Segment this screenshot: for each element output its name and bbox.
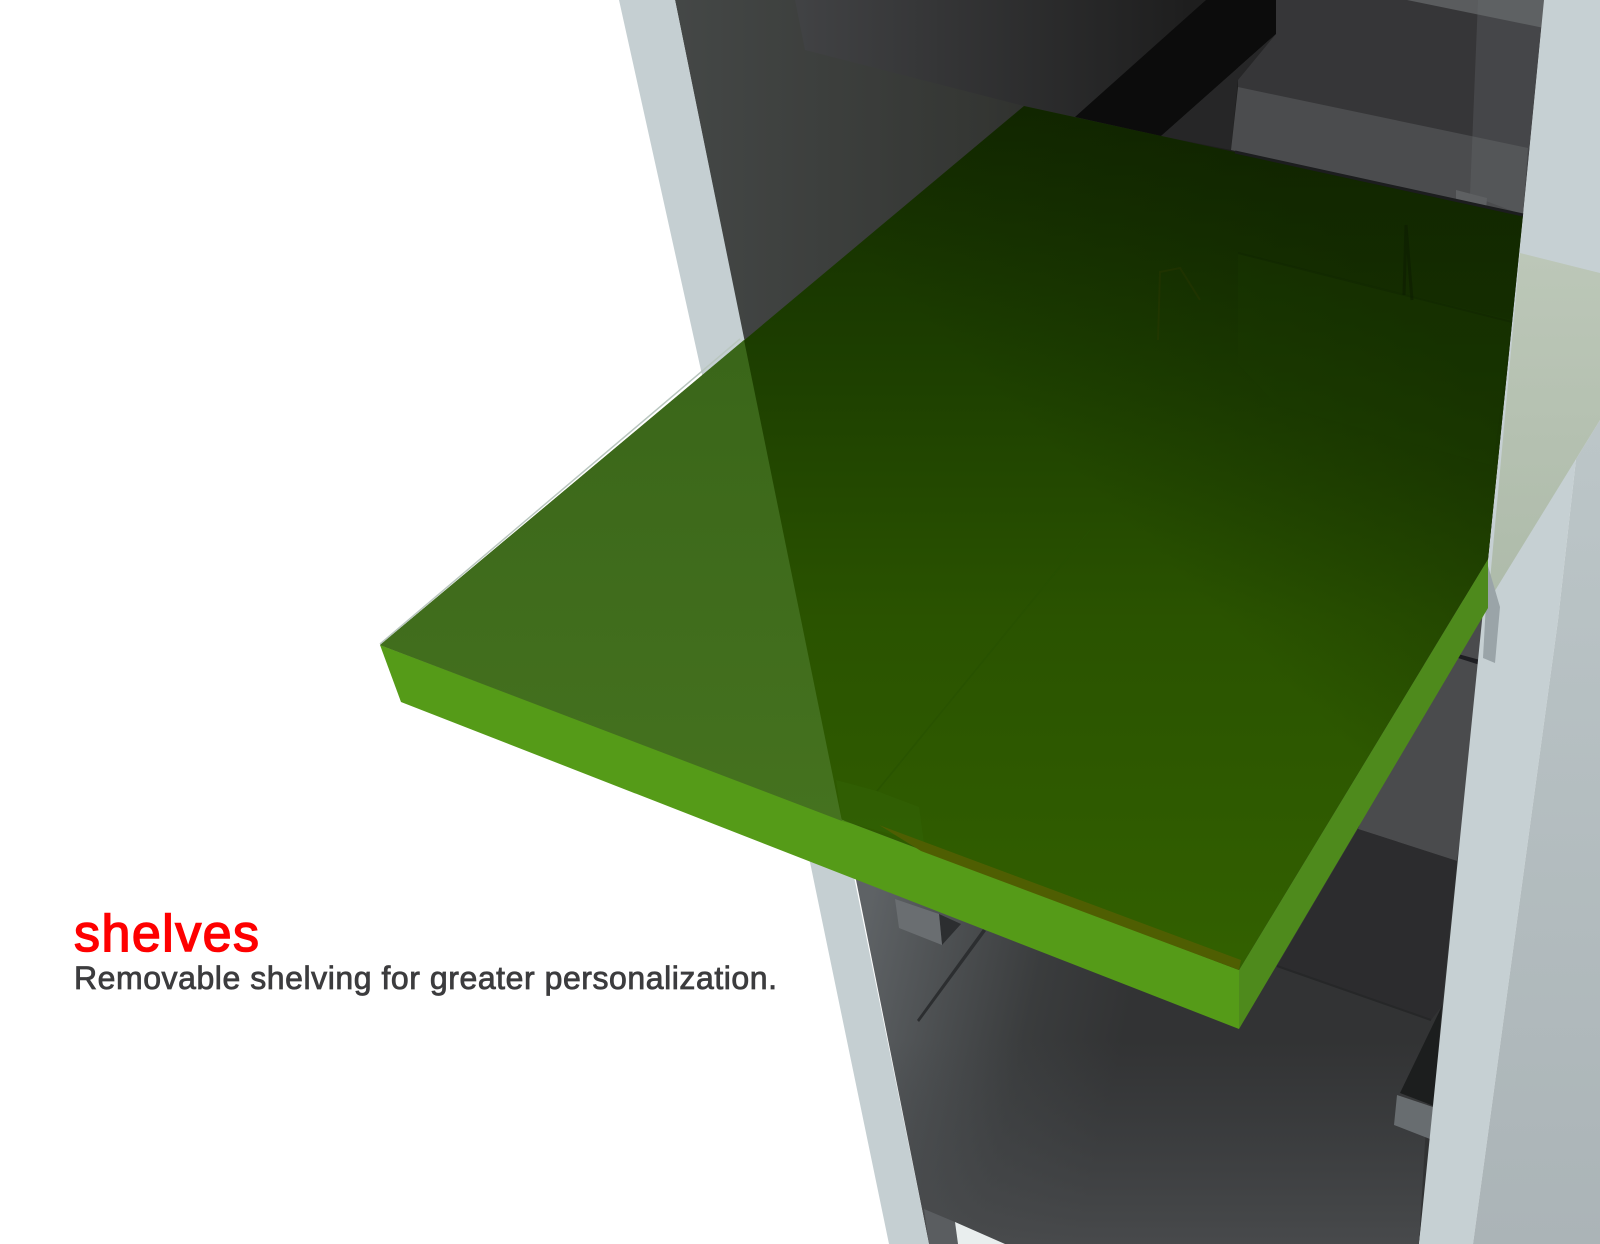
rear black stripe xyxy=(1458,654,1480,665)
beam side face xyxy=(1161,34,1276,150)
translucent rear column xyxy=(1470,0,1544,215)
shelf top surface xyxy=(380,106,1523,970)
green shelf xyxy=(380,106,1523,1029)
faint hook reflection xyxy=(1158,268,1200,340)
right frame front face xyxy=(1419,0,1600,1244)
top rear band xyxy=(1407,0,1544,28)
shelf pin bracket xyxy=(1483,566,1500,663)
interior upper compartment xyxy=(675,0,1544,640)
faint seam through shelf xyxy=(1238,253,1512,322)
lower right upper panel xyxy=(1358,600,1495,861)
description text: Removable shelving for greater personalization. xyxy=(74,960,777,996)
upper rear shelf band xyxy=(1231,87,1528,215)
thin rail line xyxy=(917,929,986,1022)
heading: shelves: shelves xyxy=(74,905,259,963)
translucent shelf end through frame xyxy=(1488,253,1600,602)
upper right back wall xyxy=(1238,0,1544,215)
left cabinet frame xyxy=(619,0,929,1244)
olive edge stripe xyxy=(879,825,1241,970)
dark panel seam xyxy=(1277,966,1431,1020)
upper back panel xyxy=(795,0,1210,117)
shelf right face xyxy=(1239,559,1488,1029)
shelf right shading xyxy=(744,106,1523,970)
white gap at bottom xyxy=(955,1222,1005,1244)
shelf portion over white background xyxy=(380,340,842,821)
highlight along left shelf edge xyxy=(380,339,740,644)
rear edge shadow xyxy=(1235,152,1523,215)
faint diagonal seam xyxy=(877,530,1090,791)
left support tab side xyxy=(939,914,961,945)
right cabinet frame xyxy=(1419,0,1600,1244)
right support tab xyxy=(1394,1095,1433,1139)
rear panel seen through shelf xyxy=(1238,253,1512,466)
shelf front face xyxy=(380,645,1239,1029)
faint slot reflection xyxy=(1404,225,1412,300)
lighter notch near front corner xyxy=(836,780,924,843)
black support beam xyxy=(1075,0,1276,136)
lower right dark panel xyxy=(1277,829,1457,1020)
lower compartment floor shading xyxy=(890,1040,1431,1244)
interior lower compartment xyxy=(840,620,1490,1244)
right frame side face xyxy=(1473,420,1600,1244)
left support tab xyxy=(895,899,942,945)
lower rear bracket xyxy=(924,1209,958,1244)
small rear bracket xyxy=(1456,190,1487,210)
right support tab shadow xyxy=(1400,1006,1442,1106)
cabinet interior xyxy=(675,0,1544,1244)
